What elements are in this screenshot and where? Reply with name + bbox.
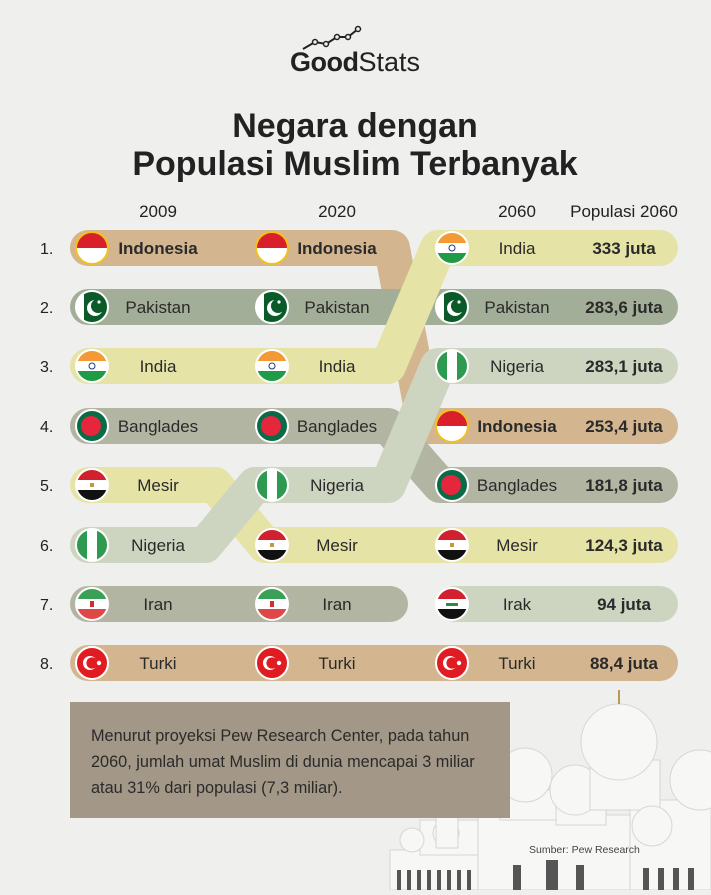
rank numbers [40, 241, 53, 673]
country names: Iran [143, 595, 173, 614]
country names: Mesir [496, 536, 538, 555]
population values [585, 239, 663, 673]
column headers: 2060 [498, 202, 536, 221]
column headers [139, 202, 678, 221]
column headers: 2020 [318, 202, 356, 221]
country names: Indonesia [297, 239, 377, 258]
country names: Mesir [137, 476, 179, 495]
country names: Indonesia [118, 239, 198, 258]
country names: Banglades [297, 417, 377, 436]
country names: Banglades [477, 476, 557, 495]
info box: atau 31% dari populasi (7,3 miliar). [91, 779, 343, 797]
population values: 283,1 juta [585, 357, 663, 376]
country names: India [140, 357, 177, 376]
logo [290, 26, 420, 77]
info box: 2060, jumlah umat Muslim di dunia mencapai 3 miliar [91, 753, 475, 771]
country names: India [319, 357, 356, 376]
country names: Iran [322, 595, 352, 614]
population values: 253,4 juta [585, 417, 663, 436]
title: Populasi Muslim Terbanyak [132, 145, 578, 183]
column headers: 2009 [139, 202, 177, 221]
population values: 333 juta [592, 239, 656, 258]
population values: 88,4 juta [590, 654, 659, 673]
mosque illustration [390, 690, 711, 890]
country names: Banglades [118, 417, 198, 436]
population values: 124,3 juta [585, 536, 663, 555]
rank numbers: 7. [40, 597, 53, 614]
column headers: Populasi 2060 [570, 202, 678, 221]
population values: 181,8 juta [585, 476, 663, 495]
rank numbers: 2. [40, 300, 53, 317]
logo: GoodStats [290, 47, 420, 77]
rank numbers: 4. [40, 419, 53, 436]
country names: Turki [318, 654, 356, 673]
rank numbers: 6. [40, 538, 53, 555]
info box: Menurut proyeksi Pew Research Center, pada tahun [91, 727, 469, 745]
country names: India [499, 239, 536, 258]
ranking bands [88, 248, 660, 663]
country names: Pakistan [304, 298, 370, 317]
country names: Mesir [316, 536, 358, 555]
country names: Pakistan [125, 298, 191, 317]
country names: Nigeria [131, 536, 185, 555]
country names: Turki [498, 654, 536, 673]
rank numbers: 8. [40, 656, 53, 673]
country names [118, 239, 557, 673]
population values: 283,6 juta [585, 298, 663, 317]
country names: Irak [503, 595, 532, 614]
country names: Nigeria [490, 357, 544, 376]
population values: 94 juta [597, 595, 651, 614]
rank numbers: 3. [40, 359, 53, 376]
flags [76, 232, 468, 679]
country names: Pakistan [484, 298, 550, 317]
country names: Turki [139, 654, 177, 673]
country names: Nigeria [310, 476, 364, 495]
title: Negara dengan [232, 107, 478, 145]
country names: Indonesia [477, 417, 557, 436]
rank numbers: 1. [40, 241, 53, 258]
source: Sumber: Pew Research [529, 844, 640, 856]
rank numbers: 5. [40, 478, 53, 495]
info box [70, 702, 510, 818]
title [132, 107, 578, 183]
